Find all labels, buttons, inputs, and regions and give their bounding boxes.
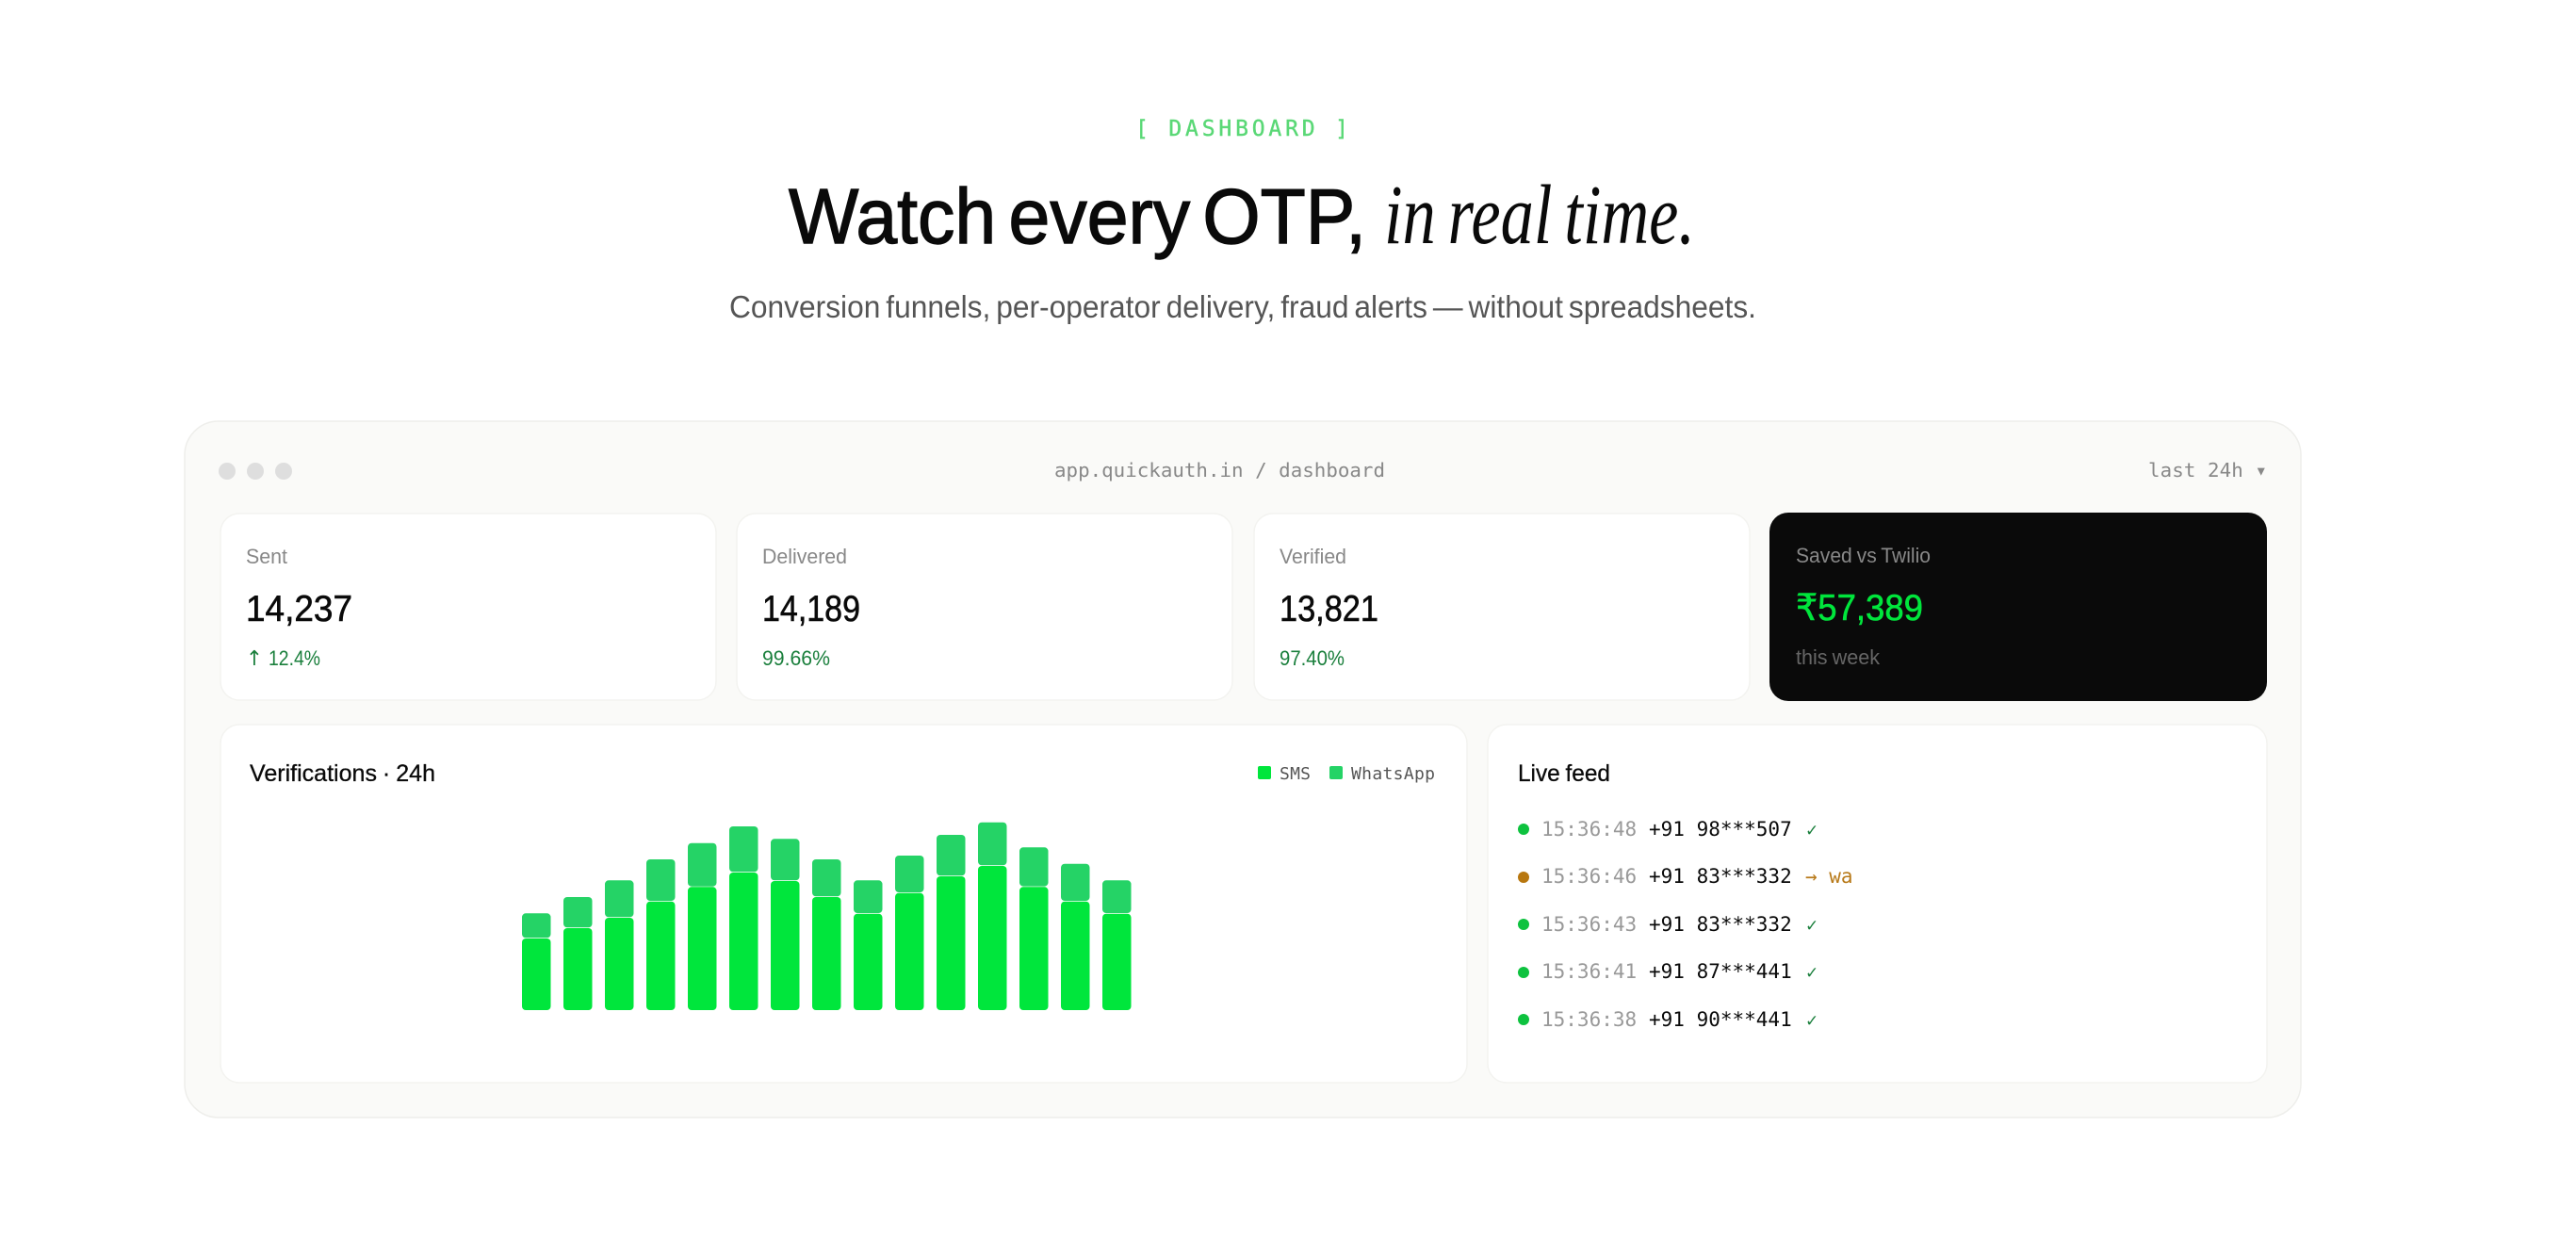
chart legend: WhatsApp [1351,764,1435,784]
stat card: sent: 12.4% [269,646,320,670]
stat card: sent [220,514,716,700]
feed row 4: 15:36:41 [1541,960,1637,983]
subtitle: Conversion funnels, per-operator delivery, fraud alerts — without spreadsheets. [729,289,1756,324]
stat card: sent: ↑ [246,647,263,671]
stat card: saved vs twilio: ₹57,389 [1796,588,1923,628]
stat card: verified [1254,514,1750,700]
feed row 2 [1518,865,1853,888]
feed row 1: +91 98***507 [1649,818,1792,841]
stat card: delivered: 14,189 [762,589,860,629]
feed row 4: ✓ [1805,964,1818,983]
range selector: last 24h ▾ [2148,459,2267,482]
title: in real time. [1384,169,1695,262]
stat card: sent: 14,237 [246,589,352,629]
feed row 2: 15:36:46 [1541,865,1637,888]
stat card: saved vs twilio: Saved vs Twilio [1796,544,1931,567]
stat card: sent: Sent [246,545,287,568]
stat card: verified: 97.40% [1280,646,1345,670]
feed row 5: +91 90***441 [1649,1008,1792,1031]
chart legend [1258,764,1435,784]
panel: live feed [1488,725,2267,1083]
feed row 1 [1518,818,1818,841]
address bar url: app.quickauth.in / dashboard [1054,459,1385,482]
stat card: verified: 13,821 [1280,589,1378,629]
feed row 5 [1518,1008,1818,1031]
feed row 1: ✓ [1805,822,1818,841]
feed row 3: +91 83***332 [1649,913,1792,936]
chart heading: Verifications · 24h [250,760,435,787]
feed heading: Live feed [1518,760,1610,787]
panel: dashboard window [185,421,2301,1118]
panel: verifications chart [220,725,1467,1083]
feed row 3: 15:36:43 [1541,913,1637,936]
stat card: saved vs twilio [1769,513,2267,701]
feed row 4: +91 87***441 [1649,960,1792,983]
feed row 2: → wa [1805,865,1853,888]
feed row 5: 15:36:38 [1541,1008,1637,1031]
title: Watch every OTP, [789,172,1366,260]
stat card: delivered: 99.66% [762,646,830,670]
eyebrow: dashboard tag: [ DASHBOARD ] [1135,117,1348,141]
feed row 4 [1518,960,1818,983]
title [789,169,1695,262]
stat card: delivered: Delivered [762,545,847,568]
stat card: delivered [737,514,1232,700]
stat card: saved vs twilio: this week [1796,645,1881,669]
feed row 3: ✓ [1805,917,1818,936]
feed row 5: ✓ [1805,1012,1818,1031]
stat card: verified: Verified [1280,545,1346,568]
feed row 2: +91 83***332 [1649,865,1792,888]
stacked bar chart [522,823,1131,1010]
feed row 3 [1518,913,1818,936]
feed row 1: 15:36:48 [1541,818,1637,841]
window controls [219,463,292,480]
chart legend: SMS [1280,764,1311,784]
